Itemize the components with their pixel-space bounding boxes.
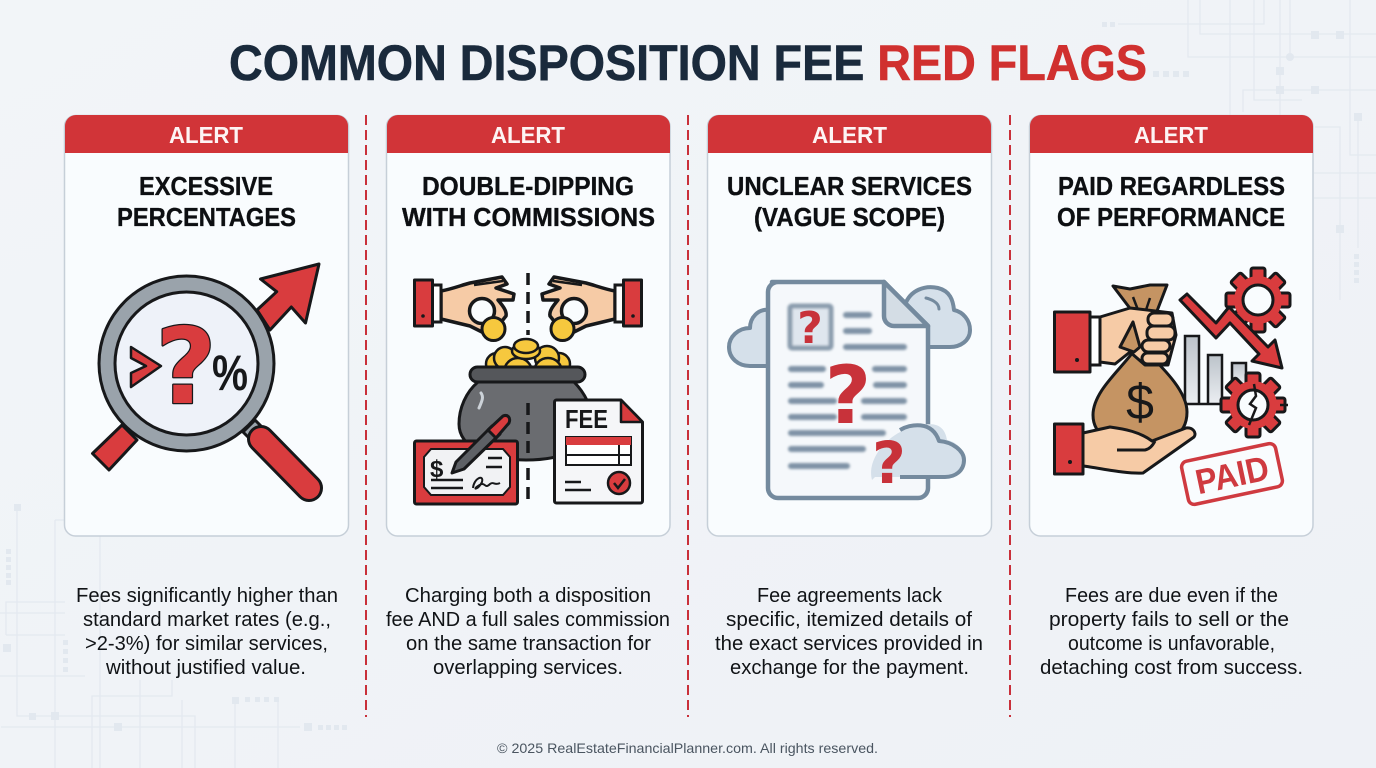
text block: unclear services description xyxy=(715,585,983,679)
icon: magnifying glass over rising arrow xyxy=(92,264,319,488)
card heading: EXCESSIVE xyxy=(139,171,273,201)
card heading: (VAGUE SCOPE) xyxy=(754,202,945,232)
text block: double-dipping description: overlapping services. xyxy=(433,657,623,679)
icon: blurry contract with question marks and clouds: ? xyxy=(872,429,906,497)
icon: two hands, coin pot, check and fee document: FEE xyxy=(565,404,608,434)
card heading xyxy=(117,171,296,232)
panel: paid regardless of performance xyxy=(1030,115,1313,536)
alert banner: ALERT xyxy=(491,122,565,148)
card background xyxy=(708,116,992,536)
text block: double-dipping description: fee AND a full sales commission xyxy=(386,609,670,631)
icon: money bag, hands, declining chart, gears and paid stamp: $ xyxy=(1126,374,1154,430)
text block: unclear services description: the exact services provided in xyxy=(715,633,983,655)
card background xyxy=(64,116,348,536)
text block: paid regardless description: detaching cost from success. xyxy=(1040,657,1303,679)
text block: excessive percentages description xyxy=(76,585,338,679)
text block: double-dipping description: on the same transaction for xyxy=(406,633,651,655)
text block: paid regardless description: outcome is unfavorable, xyxy=(1068,633,1275,655)
card heading: OF PERFORMANCE xyxy=(1057,202,1285,232)
text block: double-dipping description xyxy=(386,585,670,679)
card heading xyxy=(727,171,972,232)
panel: excessive percentages xyxy=(64,115,348,536)
card heading: PAID REGARDLESS xyxy=(1058,171,1285,201)
alert banner xyxy=(708,115,991,153)
card background xyxy=(386,116,670,536)
card background xyxy=(1030,116,1313,536)
alert banner xyxy=(1030,115,1313,153)
text block: paid regardless description: property fails to sell or the xyxy=(1049,609,1289,631)
text block: excessive percentages description: Fees significantly higher than xyxy=(76,585,338,607)
text block: unclear services description: Fee agreements lack xyxy=(757,585,943,607)
card heading xyxy=(1057,171,1285,232)
icon: two hands, coin pot, check and fee document: $ xyxy=(430,456,444,483)
icon: two hands, coin pot, check and fee document xyxy=(414,273,642,505)
alert banner: ALERT xyxy=(1134,122,1208,148)
card heading xyxy=(402,171,655,232)
icon: blurry contract with question marks and clouds xyxy=(729,282,970,498)
text block: double-dipping description: Charging both a disposition xyxy=(405,585,651,607)
icon: money bag, hands, declining chart, gears and paid stamp xyxy=(1054,268,1290,505)
text block: excessive percentages description: standard market rates (e.g., xyxy=(83,609,331,631)
text block: unclear services description: specific, itemized details of xyxy=(726,609,972,631)
alert banner xyxy=(387,115,670,153)
text block: unclear services description: exchange for the payment. xyxy=(730,657,969,679)
alert banner: ALERT xyxy=(169,122,243,148)
alert banner xyxy=(65,115,348,153)
icon: money bag, hands, declining chart, gears and paid stamp: PAID xyxy=(1192,449,1273,502)
panel: double-dipping xyxy=(386,115,670,536)
card heading: UNCLEAR SERVICES xyxy=(727,171,972,201)
text block: excessive percentages description: >2-3%) for similar services, xyxy=(85,633,328,655)
card heading: WITH COMMISSIONS xyxy=(402,202,655,232)
icon: blurry contract with question marks and clouds: ? xyxy=(797,303,823,354)
alert banner: ALERT xyxy=(812,122,887,148)
icon: magnifying glass over rising arrow: % xyxy=(212,345,248,401)
footer: © 2025 RealEstateFinancialPlanner.com. All rights reserved. xyxy=(497,740,878,756)
icon: magnifying glass over rising arrow: ? xyxy=(156,306,216,428)
text block: paid regardless description: Fees are due even if the xyxy=(1065,585,1278,607)
title: COMMON DISPOSITION FEE RED FLAGS xyxy=(229,35,1147,91)
panel: unclear services xyxy=(708,115,992,536)
text block: excessive percentages description: without justified value. xyxy=(105,657,306,679)
text block: paid regardless description xyxy=(1040,585,1303,679)
card heading: DOUBLE-DIPPING xyxy=(422,171,634,201)
icon: blurry contract with question marks and clouds: ? xyxy=(825,349,871,442)
card heading: PERCENTAGES xyxy=(117,202,296,232)
